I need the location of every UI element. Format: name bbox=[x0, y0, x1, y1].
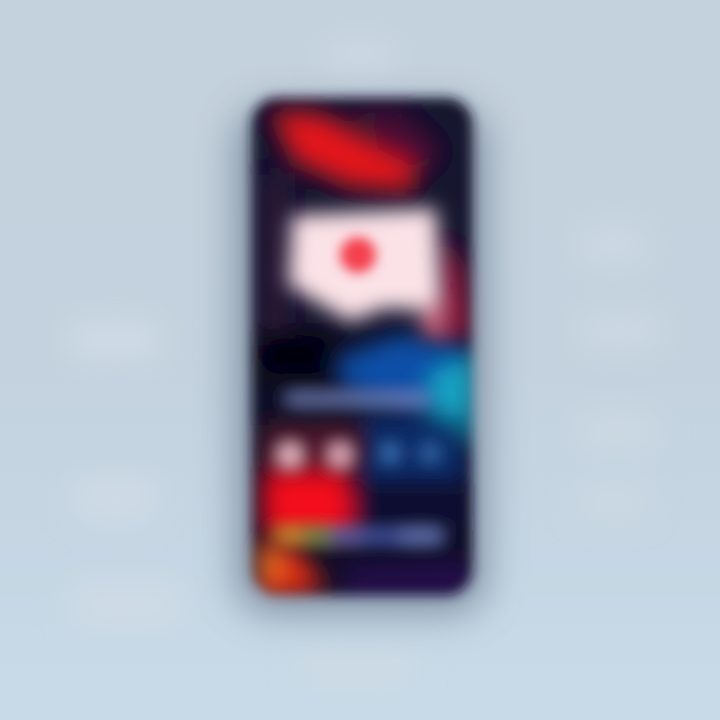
floating labels: left column bbox=[70, 320, 182, 625]
screen base colours bbox=[252, 98, 472, 338]
right edge red bbox=[440, 235, 468, 345]
phone screen bbox=[252, 98, 475, 600]
floating labels: right column bbox=[578, 225, 663, 517]
red diagonal banner bbox=[262, 112, 440, 345]
red lower panel bbox=[262, 425, 465, 534]
phone shadow bbox=[236, 108, 486, 613]
multicolour strip bbox=[275, 527, 443, 545]
blue band bbox=[335, 335, 475, 485]
dark band bbox=[260, 335, 330, 375]
floating labels: top and bottom bbox=[300, 42, 415, 686]
icon dots bbox=[277, 442, 440, 468]
card red circle bbox=[340, 237, 376, 273]
orange corner bbox=[258, 540, 472, 600]
phone bbox=[252, 98, 475, 600]
text strip bbox=[285, 391, 430, 407]
white card bbox=[288, 208, 446, 340]
phone body bbox=[252, 98, 472, 595]
